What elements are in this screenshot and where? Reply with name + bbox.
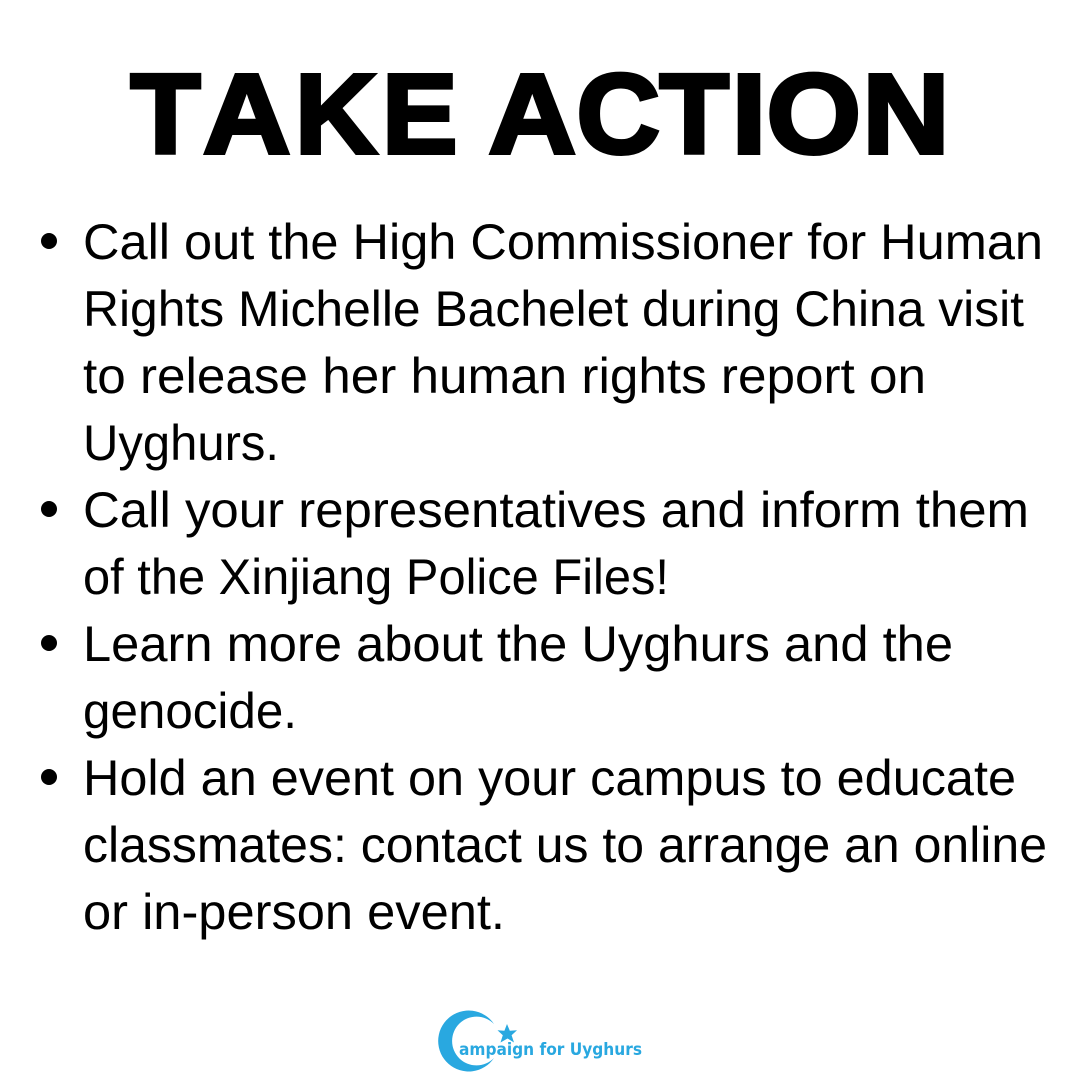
list item: call out the High Commissioner — [41, 214, 1043, 471]
logo wordmark: ampaign for Uyghurs — [459, 1040, 642, 1059]
list item: hold an event: Hold an event on your campus to educate — [83, 750, 1016, 806]
list item: hold an event: or in-person event. — [83, 884, 505, 940]
title: C — [576, 51, 660, 177]
title: K — [295, 51, 377, 177]
list item: call your representatives — [41, 482, 1029, 605]
list item: call your representatives: Call your representatives and inform them — [83, 482, 1029, 538]
list item: call out the High Commissioner: to release her human rights report on — [83, 348, 926, 404]
title: O — [766, 51, 861, 177]
title: T — [660, 51, 729, 177]
title: E — [382, 51, 458, 177]
title: A — [488, 51, 576, 177]
list item: call out the High Commissioner: Call out the High Commissioner for Human — [83, 214, 1043, 270]
list item: hold an event — [41, 750, 1047, 940]
bullet list — [41, 214, 1047, 940]
list item: call your representatives: of the Xinjiang Police Files! — [83, 549, 669, 605]
title: I — [732, 51, 766, 177]
list item: learn more — [41, 616, 953, 739]
title: T — [130, 51, 200, 177]
list item: hold an event: classmates: contact us to arrange an online — [83, 817, 1047, 873]
list item: learn more: Learn more about the Uyghurs and the — [83, 616, 953, 672]
logo: Campaign for Uyghurs — [438, 1010, 642, 1071]
list item: call out the High Commissioner: Uyghurs. — [83, 415, 279, 471]
icon: star — [498, 1024, 517, 1042]
list item: learn more: genocide. — [83, 683, 297, 739]
title: N — [862, 51, 950, 177]
list item: call out the High Commissioner: Rights Michelle Bachelet during China visit — [83, 281, 1024, 337]
title: A — [203, 51, 290, 177]
icon: crescent — [438, 1010, 494, 1071]
